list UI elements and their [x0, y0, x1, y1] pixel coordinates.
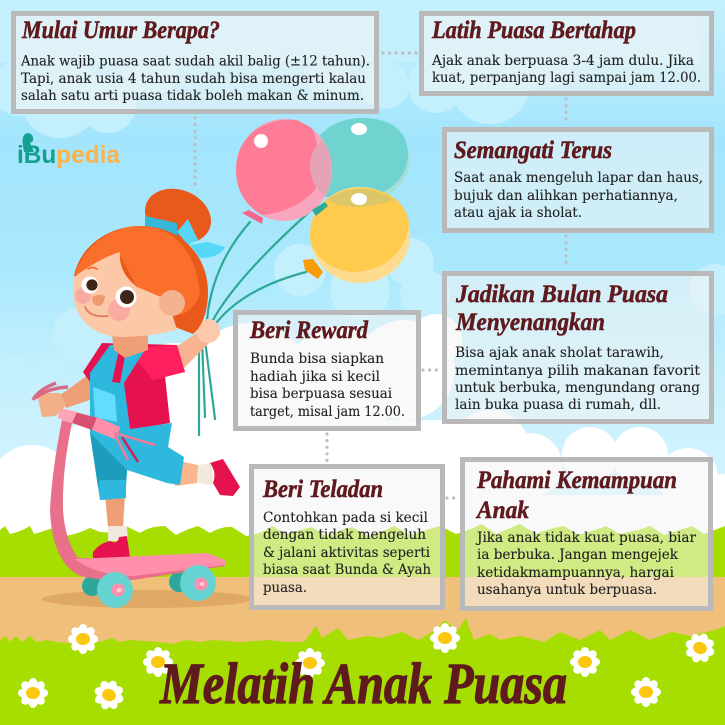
balloon: pink [236, 119, 332, 224]
body text: Anak wajib puasa saat sudah akil balig (±12 tahun). [20, 54, 370, 70]
raised leg and shoe [175, 459, 240, 496]
body text: Contohkan pada si kecil [263, 510, 428, 526]
face [73, 252, 177, 337]
body text: hadiah jika si kecil [250, 369, 380, 385]
body text [454, 170, 703, 221]
ear [159, 290, 185, 316]
body text: Jika anak tidak kuat puasa, biar [475, 530, 696, 546]
ground path [0, 577, 725, 647]
balloon: teal [310, 118, 410, 202]
flowers [18, 623, 719, 714]
panel: Semangati Terus [444, 130, 712, 230]
light clouds [0, 0, 725, 395]
scooter shadow [42, 590, 252, 608]
logo wordmark: iBupedia [17, 141, 121, 169]
scooter [50, 408, 225, 608]
main title: Melatih Anak Puasa [159, 651, 567, 716]
body text: Tapi, anak usia 4 tahun sudah bisa mengerti kalau [21, 71, 366, 87]
body text: atau ajak ia sholat. [454, 205, 582, 221]
logo figure [23, 133, 34, 152]
heading [455, 281, 668, 336]
girl character [33, 179, 240, 608]
left arm [60, 375, 96, 408]
body text: untuk berbuka, mengundang orang [455, 380, 700, 396]
hand raised [196, 319, 220, 343]
neck [112, 335, 148, 358]
pocket [93, 387, 117, 422]
body text: dengan tidak mengeluh [263, 527, 426, 543]
body text: Bunda bisa siapkan [250, 351, 384, 367]
body text [455, 345, 700, 413]
panel: Beri Teladan [252, 466, 442, 608]
body text: kuat, perpanjang lagi sampai jam 12.00. [432, 70, 701, 86]
body text: ia berbuka. Jangan mengejek [477, 547, 678, 563]
body text: memintanya pilih makanan favorit [455, 363, 700, 379]
heading: Menyenangkan [455, 309, 605, 336]
body text: salah satu arti puasa tidak boleh makan & minum. [21, 88, 364, 104]
body text: Saat anak mengeluh lapar dan haus, [454, 170, 703, 186]
heading: Latih Puasa Bertahap [431, 17, 636, 44]
hair [74, 226, 208, 334]
logo [17, 133, 121, 169]
panel: Mulai Umur Berapa [14, 14, 376, 112]
panel: Latih Puasa Bertahap [422, 14, 712, 94]
body text: & jalani aktivitas seperti [263, 545, 430, 561]
body text: Ajak anak berpuasa 3-4 jam dulu. Jika [431, 53, 694, 69]
heading: Beri Reward [249, 317, 368, 344]
balloon strings [199, 206, 316, 435]
body text: Bisa ajak anak sholat tarawih, [455, 345, 664, 361]
nose [92, 295, 105, 306]
heading: Pahami Kemampuan [476, 467, 677, 494]
hand on handle [37, 393, 66, 417]
heading: Mulai Umur Berapa? [21, 17, 220, 44]
heading: Semangati Terus [454, 137, 612, 164]
body text [475, 530, 696, 598]
dotted connectors [195, 53, 566, 498]
panel: Pahami Kemampuan Anak [462, 460, 710, 608]
heading: Anak [475, 497, 529, 524]
white clouds [0, 314, 725, 535]
right arm [172, 332, 212, 372]
body text: usahanya untuk berpuasa. [477, 582, 657, 598]
heading: Beri Teladan [262, 476, 383, 503]
body text: biasa saat Bunda & Ayah [263, 562, 431, 578]
body text: bisa berpuasa sesuai [250, 386, 392, 402]
eyebrow [88, 268, 97, 269]
body text [263, 510, 431, 596]
hair band [145, 216, 177, 238]
body text [20, 54, 370, 104]
body text: lain buka puasa di rumah, dll. [455, 397, 661, 413]
eyes [82, 276, 98, 294]
overalls [90, 345, 184, 500]
body text: ketidakmampuannya, hargai [477, 565, 674, 581]
body text: puasa. [263, 580, 307, 596]
bow [177, 219, 225, 258]
panel: Beri Reward [236, 312, 418, 428]
heading [475, 467, 677, 524]
shirt [83, 343, 185, 430]
heading: Jadikan Bulan Puasa [455, 281, 668, 308]
body text: bujuk dan alihkan perhatiannya, [454, 188, 678, 204]
standing leg and shoe [93, 495, 130, 564]
cheeks [75, 288, 91, 304]
smile [85, 307, 108, 316]
body text: target, misal jam 12.00. [250, 404, 405, 420]
balloon: yellow [303, 187, 410, 283]
background sky [0, 0, 725, 530]
panel: Jadikan Bulan Puasa Menyenangkan [444, 274, 712, 422]
body text [250, 351, 405, 420]
bottom grass [0, 618, 725, 725]
sleeve [137, 345, 185, 380]
mid grass [0, 524, 725, 580]
body text [431, 53, 701, 86]
hair bun [137, 179, 219, 253]
